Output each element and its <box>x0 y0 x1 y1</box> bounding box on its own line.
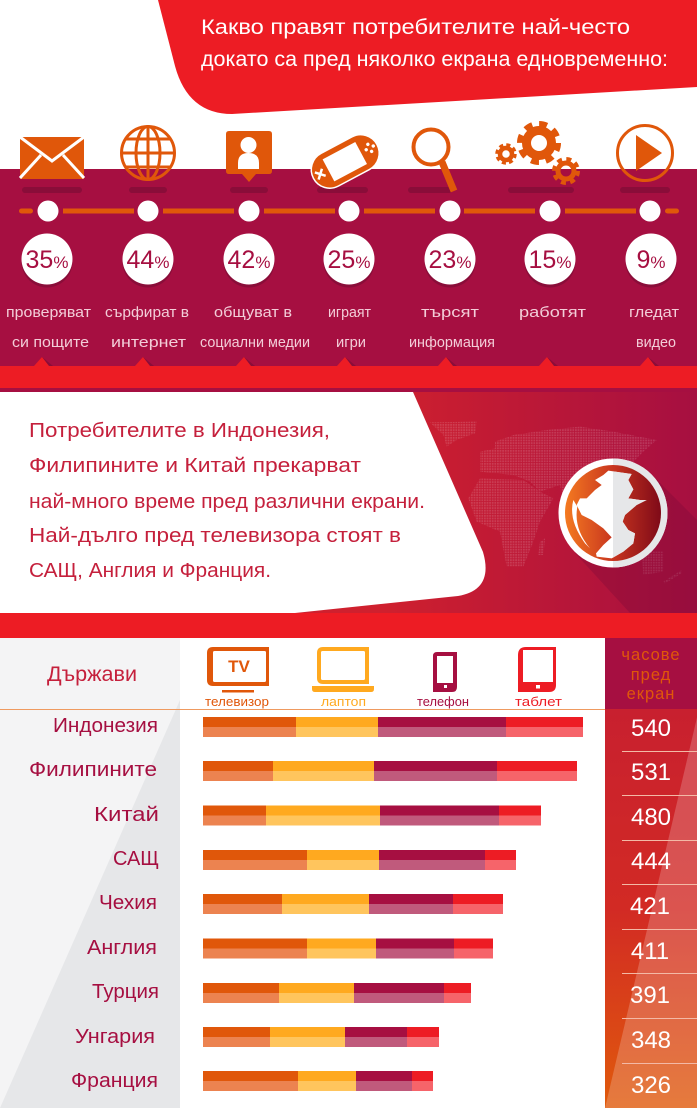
activity labels: информация <box>409 335 495 351</box>
hours heading <box>621 646 681 703</box>
country names <box>29 715 159 1092</box>
icon: phone: телефон <box>417 694 469 709</box>
bar: Чехия <box>203 894 503 914</box>
timeline <box>19 200 679 222</box>
hours values: 326 <box>631 1072 671 1099</box>
summary text: САЩ, Англия и Франция. <box>29 560 271 582</box>
red strip with pointers <box>0 357 697 388</box>
hours values: 444 <box>631 848 671 875</box>
hours values: 480 <box>631 804 671 831</box>
header rule <box>0 709 605 710</box>
panel: hours column <box>605 638 697 1108</box>
hours values: 391 <box>630 982 670 1009</box>
bar: Унгария <box>203 1027 439 1047</box>
icon: gears <box>497 124 578 183</box>
activity labels: работят <box>519 305 586 321</box>
percent badges: 15% <box>529 246 571 274</box>
icon: tv <box>205 647 269 709</box>
country names: Чехия <box>99 892 157 914</box>
title: докато са пред няколко екрана едновременно: <box>201 48 668 71</box>
hours heading: екран <box>627 685 675 703</box>
country names: Филипините <box>29 759 157 781</box>
hours values: 411 <box>631 938 669 965</box>
legend: device icons <box>205 647 562 709</box>
bar: Англия <box>203 938 493 958</box>
percent badges <box>22 234 676 288</box>
icon: game controller <box>305 128 386 195</box>
activity labels: играят <box>328 305 371 321</box>
red strip <box>0 613 697 638</box>
panel: activities band <box>0 124 697 366</box>
bar: Франция <box>203 1071 433 1091</box>
country names: Турция <box>92 981 159 1003</box>
country names: Англия <box>87 937 157 959</box>
hours heading: часове <box>621 646 681 664</box>
panel: title banner <box>158 0 697 114</box>
activity labels: видео <box>636 335 676 351</box>
white text card <box>0 392 486 613</box>
icon: video play <box>618 126 672 180</box>
hours heading: пред <box>631 666 671 684</box>
hours values <box>630 715 671 1099</box>
summary text: най-много време пред различни екрани. <box>29 491 425 513</box>
activity labels: интернет <box>111 335 186 351</box>
activity labels <box>6 305 679 351</box>
summary text <box>29 420 425 582</box>
percent badges: 9% <box>636 246 666 274</box>
percent badges: 35% <box>26 246 68 274</box>
bar: Индонезия <box>203 717 583 737</box>
title <box>201 16 668 71</box>
bar: Китай <box>203 806 541 826</box>
summary text: Най-дълго пред телевизора стоят в <box>29 525 401 547</box>
activity labels: социални медии <box>200 335 310 351</box>
country names: Индонезия <box>53 715 158 737</box>
country names: Унгария <box>75 1026 155 1048</box>
percent badges: 25% <box>328 246 370 274</box>
bar: Турция <box>203 983 471 1003</box>
hours values: 540 <box>631 715 671 742</box>
icon: laptop: лаптоп <box>321 694 366 709</box>
icon: tv: TV <box>228 657 251 676</box>
activity labels: общуват в <box>214 305 292 321</box>
icon: tablet: таблет <box>515 694 562 709</box>
stacked bar chart <box>203 717 583 1091</box>
icon: envelope <box>20 137 84 179</box>
percent badges: 42% <box>228 246 270 274</box>
panel: screen time summary <box>0 388 697 613</box>
icon: web globe <box>122 126 175 180</box>
activity labels: търсят <box>421 305 479 321</box>
percent badges: 44% <box>127 246 169 274</box>
title: Какво правят потребителите най-често <box>201 16 630 39</box>
column heading: Държави <box>47 663 137 686</box>
icon: globe <box>558 458 668 568</box>
percent badges: 23% <box>429 246 471 274</box>
icon: tv: телевизор <box>205 694 269 709</box>
country names: Франция <box>71 1070 158 1092</box>
activity labels: гледат <box>629 305 679 321</box>
panel: country column <box>0 638 180 1108</box>
bar: САЩ <box>203 850 516 870</box>
icon: phone <box>417 652 469 709</box>
country names: САЩ <box>113 848 159 870</box>
icon: tablet <box>515 647 562 709</box>
hours values: 421 <box>630 893 670 920</box>
globe long shadow <box>575 475 697 613</box>
activity labels: игри <box>336 335 366 351</box>
activity labels: проверяват <box>6 305 91 321</box>
icon: laptop <box>312 647 374 709</box>
activity labels: сърфират в <box>105 305 189 321</box>
icon: social profile <box>226 131 272 182</box>
world map dots <box>430 422 682 583</box>
activity labels: си пощите <box>12 335 89 351</box>
summary text: Филипините и Китай прекарват <box>29 455 361 477</box>
hours values: 348 <box>631 1027 671 1054</box>
icon: magnifier <box>414 130 454 191</box>
country names: Китай <box>94 804 159 826</box>
bar: Филипините <box>203 761 577 781</box>
hours values: 531 <box>631 759 671 786</box>
summary text: Потребителите в Индонезия, <box>29 420 330 442</box>
